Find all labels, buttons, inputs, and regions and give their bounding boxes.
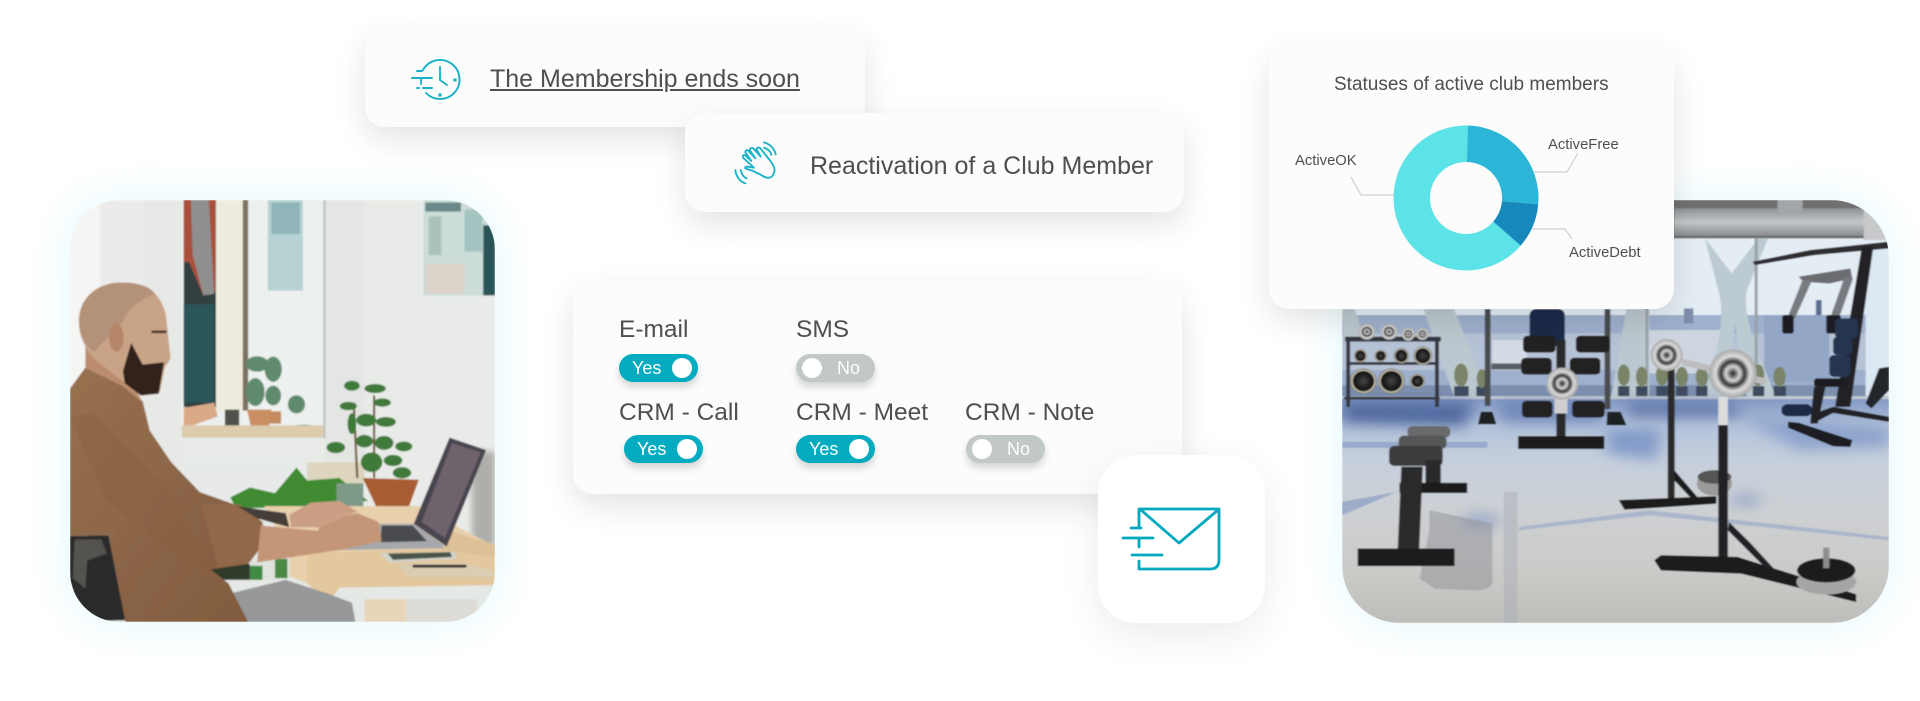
- label: activeok: ActiveOK: [1295, 153, 1357, 169]
- multi-gym machine: [1753, 242, 1889, 265]
- toggle: crm meet yes: [796, 435, 875, 463]
- icon: waving hand: [734, 141, 777, 184]
- donut chart: [1295, 126, 1641, 270]
- toggle: crm call yes: Yes: [637, 439, 666, 459]
- phone and notebook: [379, 552, 457, 562]
- text: reactivation of a club member: Reactivation of a Club Member: [810, 152, 1153, 180]
- toggle: sms no: [796, 354, 875, 382]
- card: membership ends soon: [365, 28, 865, 127]
- wall art: [423, 200, 495, 295]
- label: e-mail: E-mail: [619, 316, 688, 343]
- laptop: [414, 438, 486, 547]
- text: the membership ends soon: The Membership ends soon: [490, 65, 800, 93]
- slice: activeok: [1394, 125, 1521, 270]
- concrete window columns: [1703, 238, 1776, 397]
- desk: [264, 506, 495, 603]
- toggle: crm meet yes: Yes: [809, 439, 838, 459]
- toggle: e-mail yes: [619, 354, 698, 382]
- toggle: crm note no: No: [1007, 439, 1030, 459]
- dumbbell rack: [1344, 324, 1441, 407]
- squat stands with barbell: [1697, 472, 1732, 496]
- icon: envelope with speed lines: [1122, 508, 1220, 570]
- toggle: e-mail yes: Yes: [632, 358, 661, 378]
- trousers: [228, 580, 355, 622]
- weight bench: [1358, 426, 1467, 566]
- potted plant: [354, 396, 374, 478]
- card: reactivation of a club member: [685, 113, 1184, 212]
- mirror: [182, 200, 325, 439]
- slice: activefree: [1467, 126, 1538, 204]
- toggle: sms no: No: [837, 358, 860, 378]
- leader line: activeok: [1351, 177, 1394, 195]
- neck and head: [85, 346, 143, 403]
- slice: activedebt: [1493, 201, 1538, 246]
- arm: [257, 513, 382, 562]
- label: activefree: ActiveFree: [1548, 137, 1619, 153]
- background plants and objects: [307, 462, 364, 483]
- planters: [1454, 386, 1786, 397]
- label: crm note: CRM - Note: [965, 399, 1094, 426]
- icon: clock with speed lines: [411, 59, 460, 100]
- leader line: activefree: [1534, 153, 1578, 172]
- shirt: [70, 367, 264, 622]
- card: mail icon tile: [1098, 455, 1265, 623]
- chair: [70, 535, 125, 621]
- photo: man working on laptop at desk: [70, 200, 495, 622]
- panel: statuses of active club members chart: [1269, 46, 1674, 309]
- chart title: Statuses of active club members: [1334, 74, 1609, 95]
- label: crm call: CRM - Call: [619, 399, 739, 426]
- city skyline: [1342, 315, 1889, 397]
- label: activedebt: ActiveDebt: [1569, 245, 1641, 261]
- photo: gym interior with equipment: [1342, 200, 1889, 623]
- label: crm meet: CRM - Meet: [796, 399, 928, 426]
- toggle: crm call yes: [624, 435, 703, 463]
- leader line: activedebt: [1532, 229, 1572, 239]
- floor: [1342, 397, 1889, 623]
- panel: communication channel toggles: [573, 282, 1182, 494]
- toggle: crm note no: [966, 435, 1045, 463]
- central back-extension machine: [1478, 309, 1626, 425]
- label: sms: SMS: [796, 316, 849, 343]
